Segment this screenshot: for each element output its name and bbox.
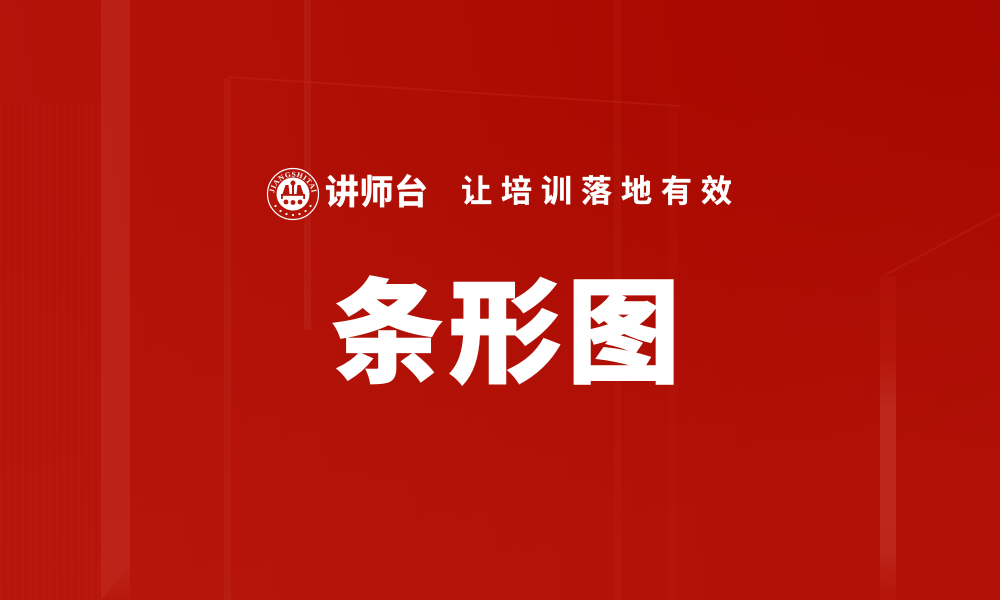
logo: Jiangshitai seal <box>266 168 320 220</box>
logo: Jiangshitai seal: JIANGSHITAI <box>270 172 317 193</box>
brand name: 讲师台 <box>325 174 428 212</box>
title: 条形图 <box>331 271 685 397</box>
slogan: 让培训落地有效 <box>461 174 741 209</box>
